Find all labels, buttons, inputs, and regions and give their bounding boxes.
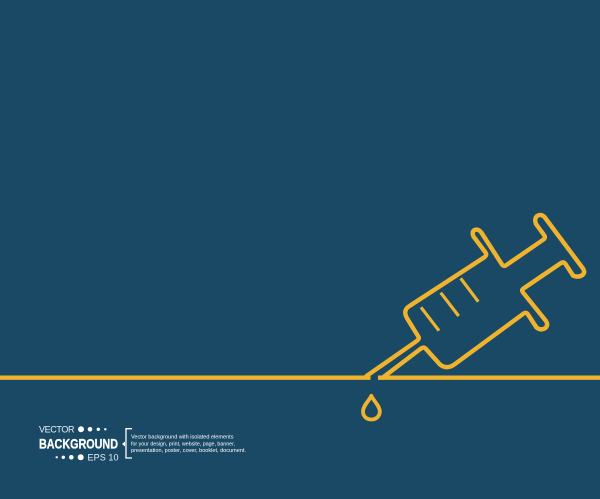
description text: Vector background with isolated elements (131, 434, 234, 440)
label: background: BACKGROUND (39, 436, 118, 452)
description text (131, 434, 246, 454)
label: vector: VECTOR (39, 424, 75, 434)
icon: syringe with baseline (0, 215, 600, 378)
icon: drop (363, 396, 380, 420)
dots: lower row (56, 454, 84, 460)
syringe tick marks (421, 278, 478, 331)
bracket (126, 429, 132, 458)
description text: for your design, print, website, page, banner, (131, 441, 235, 447)
icon: pointer (122, 442, 125, 446)
label: eps 10: EPS 10 (88, 453, 118, 463)
description text: presentation, poster, cover, booklet, document. (131, 448, 246, 454)
dots: upper row (78, 426, 107, 432)
logo: vector background eps 10 (39, 424, 132, 463)
